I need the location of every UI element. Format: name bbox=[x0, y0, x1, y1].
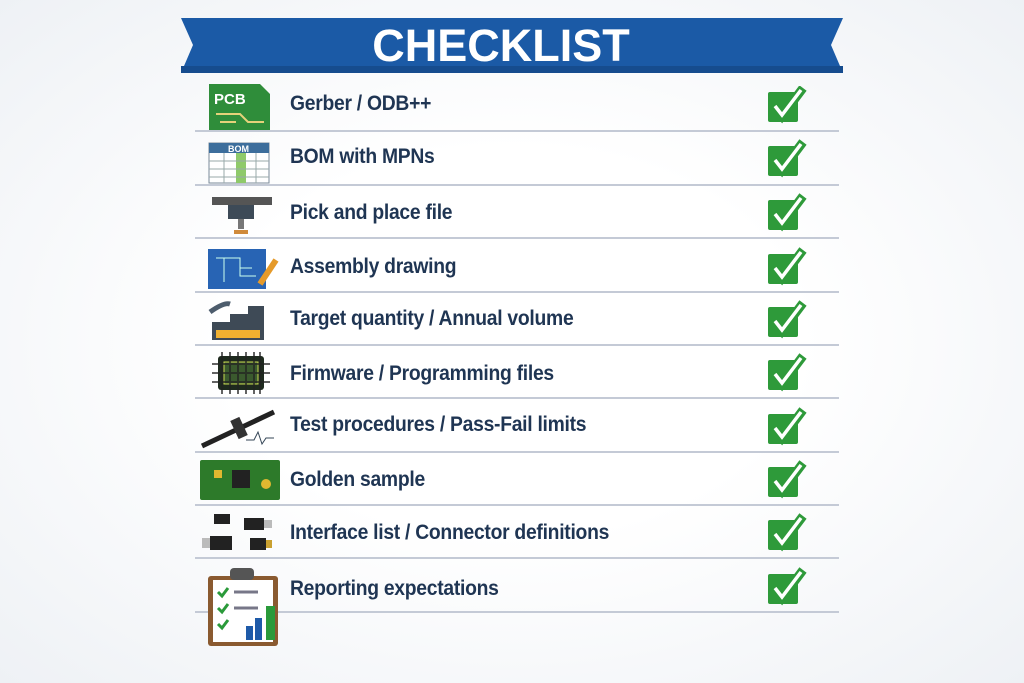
checklist text items: Test procedures / Pass-Fail limits bbox=[290, 413, 586, 436]
checklist text items: Golden sample bbox=[290, 468, 425, 491]
checklist text items: Firmware / Programming files bbox=[290, 362, 554, 385]
title banner bbox=[181, 18, 843, 73]
icon: assembly drawing bbox=[208, 249, 278, 289]
checklist text items: Reporting expectations bbox=[290, 577, 499, 600]
icon: pick and place bbox=[212, 197, 272, 234]
checklist text items: Gerber / ODB++ bbox=[290, 92, 431, 115]
icon: test probe bbox=[201, 410, 275, 448]
icon: report clipboard bbox=[208, 568, 278, 646]
icon: golden sample board bbox=[200, 460, 280, 500]
checklist text items: Interface list / Connector definitions bbox=[290, 521, 609, 544]
checklist text items: BOM with MPNs bbox=[290, 145, 435, 168]
icon: BOM spreadsheet: BOM bbox=[228, 144, 249, 154]
icon: connectors bbox=[202, 514, 272, 550]
icon: factory volume bbox=[208, 301, 264, 340]
icon: PCB file: PCB bbox=[214, 91, 246, 108]
title: CHECKLIST bbox=[372, 20, 630, 71]
check marks bbox=[768, 86, 806, 606]
checklist text items: Assembly drawing bbox=[290, 255, 456, 278]
icon: chip bbox=[212, 352, 270, 394]
checklist text items: Target quantity / Annual volume bbox=[290, 307, 573, 330]
icon: PCB file bbox=[209, 84, 270, 130]
icon: BOM spreadsheet bbox=[208, 142, 270, 184]
checklist text items: Pick and place file bbox=[290, 201, 452, 224]
